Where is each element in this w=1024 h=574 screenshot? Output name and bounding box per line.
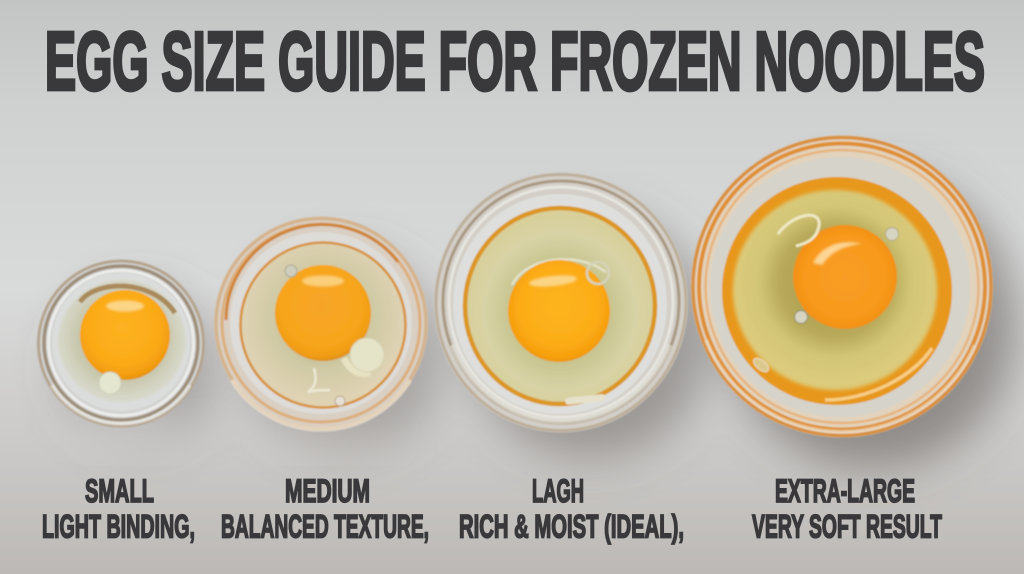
amber arc above yolk [80,286,175,313]
label: medium [221,473,429,544]
chalaza curl [778,215,819,246]
bowl: extra-large egg [691,136,993,438]
yolk [508,260,610,362]
yolk highlight [302,276,344,286]
yolk [793,225,897,329]
lower rim reflection [825,348,932,400]
label: medium: MEDIUM [285,473,370,509]
cast shadows under the bowls [62,176,1018,468]
bowl: large egg [434,172,688,432]
label: small: SMALL [85,473,154,509]
air bubble [587,262,609,284]
label: small [42,473,195,544]
yolk highlight [106,300,144,312]
label: extra-large: EXTRA-LARGE [775,473,915,509]
label: extra-large [752,473,942,544]
caustic light below the bowls [75,415,400,449]
chalaza and bubbles [285,265,384,406]
label: large: RICH & MOIST (IDEAL), [459,508,684,544]
label: small: LIGHT BINDING, [42,508,195,544]
bowl: small egg [37,260,205,428]
egg white [733,190,937,390]
yolk membrane arc [512,259,606,285]
yolk highlight [813,242,862,265]
label: large: LAGH [532,473,584,509]
yolk highlight [529,274,577,288]
label: large [459,473,684,544]
yolk [275,265,371,361]
air bubble [99,372,121,394]
egg white [58,280,186,402]
air bubbles [751,228,898,374]
egg white with amber rim [240,242,406,408]
bowl: medium egg [214,216,428,430]
yolk [80,290,170,380]
pale label mark [565,394,605,405]
label: medium: BALANCED TEXTURE, [221,508,429,544]
egg white with amber rim [465,208,655,404]
amber rim of egg white [722,177,952,405]
